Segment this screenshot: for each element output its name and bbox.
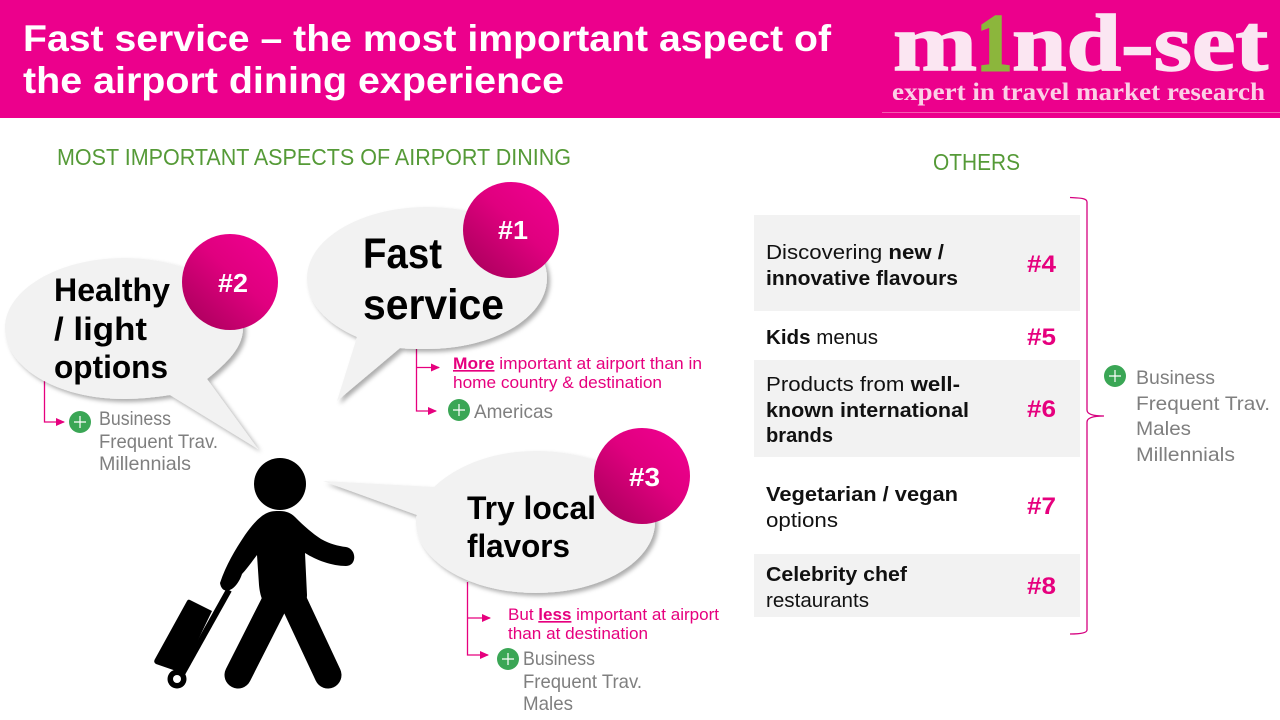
callout: try local notes: Business (523, 648, 595, 670)
heading: most important aspects: MOST IMPORTANT ASPECTS OF AIRPORT DINING (57, 144, 571, 170)
rank badge #1: #1 (498, 215, 528, 245)
connector: try local flavors (468, 582, 490, 655)
callout: healthy options segments: Business (99, 408, 171, 430)
brace: others (1070, 198, 1104, 634)
bubble text: healthy / light options: Healthy (54, 272, 170, 308)
bubble text: fast service: service (363, 281, 504, 329)
speech bubble: try local flavors (323, 451, 655, 593)
rank badge #2: #2 (218, 268, 248, 298)
callout: others segments (1104, 365, 1270, 466)
callout: others segments: Frequent Trav. (1136, 393, 1270, 415)
row #7: Vegetarian / vegan (766, 484, 958, 506)
bubble text: try local flavors: flavors (467, 528, 570, 564)
speech bubble: healthy options (5, 258, 258, 449)
bubble text: fast service (363, 230, 504, 329)
title: Fast service – the most important aspect of (23, 18, 832, 59)
row #8: Celebrity chef (766, 564, 907, 586)
row #6: #6 (1027, 396, 1056, 423)
row #4: innovative flavours (766, 268, 958, 290)
logo: mind-set: expert in travel market research (892, 79, 1265, 106)
row #7: options (766, 510, 838, 532)
callout: fast service notes: More important at airport than in (453, 355, 702, 373)
bubble text: healthy / light options: / light (54, 311, 147, 347)
row #7: #7 (1027, 493, 1056, 520)
row #5: #5 (1027, 324, 1056, 351)
callout: try local notes: But less important at airport (508, 606, 719, 624)
speech bubble: fast service (307, 207, 547, 401)
callout: healthy options segments: Millennials (99, 453, 191, 475)
bubble text: try local flavors: Try local (467, 490, 596, 526)
callout: others segments: Business (1136, 367, 1215, 389)
callout: fast service notes (448, 355, 702, 423)
logo: mind-set (882, 0, 1280, 113)
row #4: #4 (1027, 251, 1057, 278)
row #5 (754, 311, 1080, 360)
bubble text: healthy / light options: options (54, 349, 168, 385)
row #6: known international (766, 400, 969, 422)
icon: plus (448, 399, 470, 421)
rank badge #1 (463, 182, 559, 278)
icon: plus (1104, 365, 1126, 387)
logo: mind-set: 1 (977, 0, 1012, 88)
callout: try local notes (497, 606, 719, 715)
icon: traveller with suitcase (154, 458, 354, 688)
row #6: brands (766, 425, 833, 447)
callout: healthy options segments (69, 408, 218, 475)
heading: others: OTHERS (933, 149, 1020, 175)
row #6: Products from well- (766, 374, 960, 396)
bubble text: healthy / light options (54, 272, 170, 385)
logo: mind-set: nd-set (1012, 0, 1268, 88)
row #5: Kids menus (766, 327, 878, 349)
row #8: #8 (1027, 573, 1056, 600)
header banner (0, 0, 1280, 118)
row #4 (754, 215, 1080, 311)
connector: healthy options (44, 381, 64, 422)
icon: plus (69, 411, 91, 433)
callout: try local notes: Frequent Trav. (523, 671, 642, 693)
callout: fast service notes: Americas (474, 401, 553, 423)
callout: fast service notes: home country & destination (453, 374, 662, 392)
row #7 (754, 457, 1080, 554)
bubble text: fast service: Fast (363, 230, 442, 278)
panel: others list (754, 215, 1080, 617)
rank badge #3 (594, 428, 690, 524)
row #4: Discovering new / (766, 242, 944, 264)
callout: healthy options segments: Frequent Trav. (99, 431, 218, 453)
connector: fast service (416, 349, 439, 411)
icon: plus (497, 648, 519, 670)
callout: try local notes: than at destination (508, 625, 648, 643)
title: the airport dining experience (23, 60, 564, 101)
row #8: restaurants (766, 590, 869, 612)
logo: mind-set: m (893, 0, 977, 88)
row #8 (754, 554, 1080, 617)
callout: others segments: Males (1136, 418, 1191, 440)
title (23, 18, 832, 101)
row #6 (754, 360, 1080, 457)
callout: try local notes: Males (523, 693, 573, 715)
callout: others segments: Millennials (1136, 444, 1235, 466)
rank badge #2 (182, 234, 278, 330)
rank badge #3: #3 (629, 462, 660, 492)
bubble text: try local flavors (467, 490, 596, 564)
